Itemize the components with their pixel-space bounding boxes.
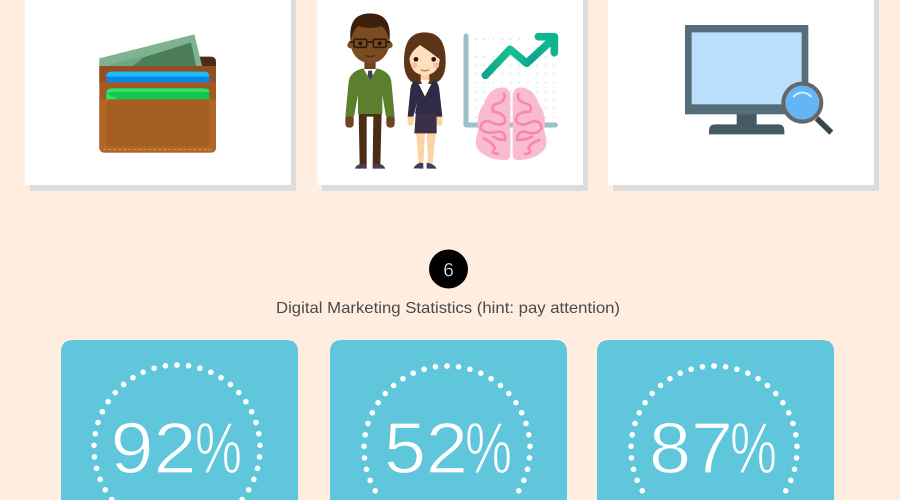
- panel: 87% stat: [597, 340, 834, 500]
- icon: brain: [476, 87, 546, 160]
- stat value 87%: [649, 409, 777, 489]
- icon: wallet: [99, 34, 216, 153]
- stat value 87%: 87: [649, 409, 733, 489]
- stat value 52%: 52: [384, 409, 468, 489]
- stat value 87%: %: [730, 409, 777, 489]
- chart: growth chart with arrow: [466, 35, 557, 125]
- panel: 92% stat: [61, 340, 298, 500]
- heading: digital marketing statistics: Digital Marketing Statistics (hint: pay attention): [276, 300, 620, 317]
- panel: 52% stat: [330, 340, 567, 500]
- dotted ring: [364, 366, 530, 500]
- stat value 52%: [384, 409, 512, 489]
- dotted ring: [631, 366, 797, 500]
- icon: woman in suit: [404, 32, 446, 169]
- icon: man with glasses: [345, 13, 395, 169]
- stat value 52%: %: [465, 409, 512, 489]
- stat value 92%: %: [195, 409, 242, 489]
- dotted ring: [94, 365, 260, 500]
- step number badge: [429, 250, 468, 288]
- stat value 92%: 92: [110, 409, 196, 489]
- stat value 92%: [110, 409, 242, 489]
- step number badge: 6: [443, 260, 454, 282]
- panel: people and growth card: [317, 0, 588, 191]
- panel: monitor card: [608, 0, 879, 191]
- icon: monitor with magnifier: [685, 25, 831, 134]
- panel: wallet card: [25, 0, 296, 191]
